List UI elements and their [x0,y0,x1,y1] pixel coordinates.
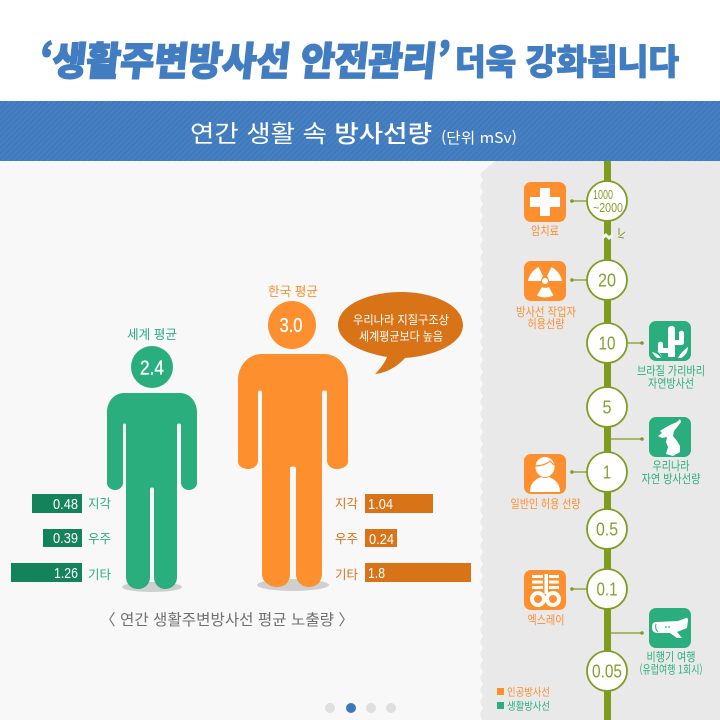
legend: 인공방사선 [507,684,550,700]
bars: korea average: 0.24 [369,531,394,548]
icon: x-ray [524,570,566,610]
bars: korea average [335,493,471,583]
label: korea average: 한국 평균 [268,281,318,300]
title: ‘생활주변방사선 안전관리’ [37,31,453,87]
header band: (단위 mSv) [441,127,517,148]
shadow [122,582,182,592]
shadow [257,579,329,591]
scale node: 1000~2000: 1000 [593,187,613,202]
panel: right background [480,161,720,720]
scale node: 1 [587,452,627,492]
header band [0,101,720,161]
value: 2.4: 2.4 [140,358,164,380]
figure: world average [107,324,197,592]
caption: 〈 연간 생활주변방사선 평균 노출량 〉 [100,608,354,630]
scale node: 0.5: 0.5 [596,520,618,540]
icon: person [524,454,566,494]
label: 브라질 가리바리 자연방사선 [637,362,705,392]
timeline axis [602,161,625,720]
scale node: 1: 1 [603,462,611,482]
label: 엑스레이: 엑스레이 [528,611,564,628]
bars: korea average: 지각 [335,493,358,512]
bar: 우주 0.24 [365,529,397,547]
body [238,354,348,587]
scale node: 5 [587,387,627,427]
icon: cancer therapy cross [524,182,566,222]
head [131,346,173,388]
scale node: 5: 5 [602,398,612,418]
scale node: 10 [587,323,627,363]
label: 비행기 여행 (유럽여행 1회시): (유럽여행 1회시) [640,662,702,678]
legend: 생활방사선 [507,698,550,714]
pagination dots [325,703,396,713]
label: 일반인 허용 선량: 일반인 허용 선량 [510,495,580,512]
bars: world average: 지각 [88,493,111,512]
label: 우리나라 자연 방사선량 [642,457,700,487]
scale node: 0.5 [587,509,627,549]
callout: 우리나라 지질구조상 [353,311,449,328]
scale node: 0.05: 0.05 [592,662,622,682]
scale node: 10: 10 [598,334,616,354]
bar: 지각 1.04 [365,494,433,513]
scale node: 0.1 [587,569,627,609]
axis break [602,233,613,240]
icon: airplane [649,608,691,648]
bars: world average: 1.26 [54,565,78,582]
bars: korea average: 우주 [335,528,358,547]
icon: korean peninsula [649,417,691,457]
panel: left background [0,161,490,720]
scale node: 1000~2000 [587,181,627,221]
bars: korea average: 1.04 [368,496,393,513]
bar: 우주 0.39 [43,529,82,547]
bars: world average [11,493,111,583]
label: world average: 세계 평균 [127,324,177,343]
scale node: 20 [587,260,627,300]
body [107,393,197,589]
label: 암치료: 암치료 [531,222,559,239]
connectors [571,200,643,634]
legend: living [497,702,504,709]
figure: korea average [238,281,348,591]
icon: radiation [524,261,566,301]
bar: 기타 1.8 [365,563,471,582]
legend [497,684,550,714]
label: 비행기 여행 (유럽여행 1회시): 비행기 여행 [646,648,696,665]
label: 방사선 작업자 허용선량: 허용선량 [528,315,564,332]
label: 브라질 가리바리 자연방사선: 브라질 가리바리 [637,362,705,379]
label: 비행기 여행 (유럽여행 1회시) [640,648,702,678]
scale node: 0.1: 0.1 [596,580,618,600]
bars: world average: 0.39 [53,530,78,547]
title [37,31,679,87]
label: 방사선 작업자 허용선량: 방사선 작업자 [516,303,576,320]
scale node: 1000~2000: ~2000 [593,200,623,215]
bars: world average: 0.48 [53,496,78,513]
bars: korea average: 기타 [335,564,358,583]
scale node: 0.05 [587,651,627,691]
bar: 지각 0.48 [32,494,82,513]
head [268,301,316,349]
label: 우리나라 자연 방사선량: 자연 방사선량 [642,470,700,487]
label: 방사선 작업자 허용선량 [516,303,576,332]
bars: world average: 기타 [88,564,111,583]
label: 브라질 가리바리 자연방사선: 자연방사선 [648,374,694,392]
legend: artificial [497,688,504,695]
value: 3.0: 3.0 [280,315,302,337]
callout [338,292,463,374]
scale node: 20: 20 [598,270,616,290]
bars: korea average: 1.8 [368,565,385,582]
header band: 연간 생활 속 방사선량 [190,114,432,149]
icon: cactus [649,321,691,361]
label: 우리나라 자연 방사선량: 우리나라 [652,457,690,474]
bars: world average: 우주 [88,528,111,547]
title: 더욱 강화됩니다 [455,34,679,86]
callout: 세계평균보다 높음 [359,328,443,344]
bar: 기타 1.26 [11,563,82,582]
